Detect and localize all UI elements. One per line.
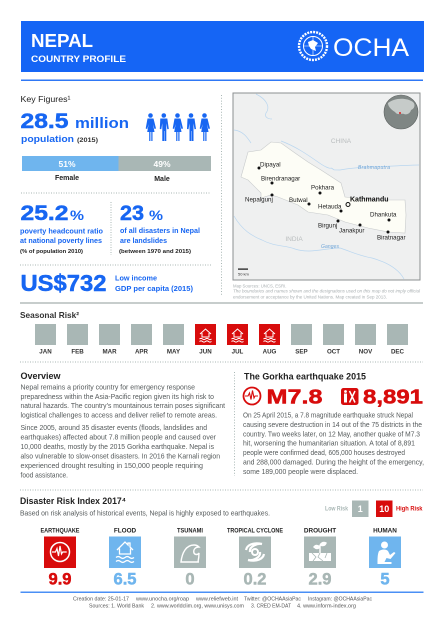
death toll value: 8,891 bbox=[363, 386, 423, 408]
hazard: tropical cyclone bbox=[227, 528, 284, 588]
month labels: DEC bbox=[391, 348, 405, 356]
overview text: 10,000 deaths, mostly by the 2015 Gorkha earthquake. Nepal is bbox=[20, 442, 214, 451]
cities: Biratnagar bbox=[377, 234, 406, 242]
cities: Kathmandu bbox=[350, 196, 388, 204]
heading: seasonal risk: Seasonal Risk² bbox=[20, 310, 79, 320]
cities bbox=[245, 162, 406, 242]
map notes: Map Sources: UNCS, ESRI. bbox=[233, 284, 286, 288]
legend: risk scale: 10 bbox=[379, 504, 389, 514]
overview text: food assistance. bbox=[20, 470, 68, 480]
population figure: 28.5 bbox=[20, 110, 69, 133]
gender bar: 51% bbox=[58, 159, 76, 169]
panel: seasonal risk bbox=[20, 310, 408, 356]
scale bar bbox=[238, 268, 250, 276]
icon: people bbox=[146, 113, 210, 141]
hazard: tropical cyclone: TROPICAL CYCLONE bbox=[227, 528, 284, 534]
icons: flood months bbox=[200, 329, 276, 342]
gender bar bbox=[22, 156, 211, 183]
overview text: also vulnerable to slow-onset disasters. In 2016 the Karnali region bbox=[20, 452, 220, 460]
icon: globe locator bbox=[384, 95, 418, 129]
hazard: flood: 6.5 bbox=[114, 570, 136, 588]
landslide figure: are landslides bbox=[120, 238, 167, 245]
population figure: population bbox=[21, 134, 74, 144]
icon: seismic circle bbox=[244, 388, 260, 404]
overview text: logistical challenges to access and deliver relief to remote areas. bbox=[20, 410, 217, 420]
panel: overview bbox=[20, 371, 225, 480]
hazard: tsunami: TSUNAMI bbox=[177, 528, 203, 534]
month labels bbox=[39, 348, 405, 356]
month labels: APR bbox=[135, 348, 149, 356]
GDP figure: GDP per capita (2015) bbox=[115, 286, 193, 293]
hazard: earthquake: 9.9 bbox=[49, 570, 71, 588]
earthquake text: and 288,000 damaged. During the height of the emergency, bbox=[243, 458, 424, 466]
legend: risk scale: High Risk bbox=[396, 506, 423, 512]
map notes: The boundaries and names shown and the designations used on this map do not imply official bbox=[233, 288, 421, 294]
footer bbox=[73, 596, 372, 610]
overview text: Since 2005, around 35 disaster events (floods, landslides and bbox=[20, 423, 207, 432]
legend: risk scale bbox=[325, 500, 423, 517]
landslide figure bbox=[119, 202, 200, 255]
rivers bbox=[234, 94, 419, 279]
population figure: million bbox=[75, 116, 129, 132]
cities: Birendranagar bbox=[261, 176, 300, 182]
map of Nepal bbox=[233, 93, 420, 280]
hazard: earthquake bbox=[40, 528, 80, 588]
earthquake text: some 189,000 people were displaced. bbox=[243, 467, 358, 476]
cities: Dhankuta bbox=[370, 212, 397, 218]
gender bar: Female bbox=[55, 175, 79, 182]
poverty figure: % bbox=[70, 207, 85, 223]
hazard: flood: FLOOD bbox=[114, 528, 137, 534]
footer: Instagram: @OCHAAsiaPac bbox=[308, 596, 372, 602]
map notes: endorsement or acceptance by the United Nations. Map created in Sep 2013. bbox=[233, 294, 387, 300]
month labels: JUL bbox=[232, 348, 244, 356]
panel: key figures bbox=[20, 94, 211, 296]
legend: risk scale: Low Risk bbox=[325, 506, 348, 512]
cities: Birgunj bbox=[318, 222, 337, 230]
icon: UN emblem bbox=[299, 32, 327, 60]
overview text bbox=[20, 382, 225, 480]
earthquake text bbox=[243, 410, 424, 476]
title: NEPAL bbox=[31, 30, 93, 51]
GDP figure: Low income bbox=[115, 276, 157, 282]
cities: Pokhara bbox=[311, 184, 335, 192]
scale bar: 50 km bbox=[238, 272, 250, 276]
heading: Gorkha earthquake: The Gorkha earthquake 2015 bbox=[244, 372, 367, 382]
month squares bbox=[35, 324, 408, 345]
month labels: NOV bbox=[359, 348, 373, 356]
hazard: earthquake: EARTHQUAKE bbox=[40, 528, 80, 534]
hazard: drought: 2.9 bbox=[309, 570, 331, 588]
overview text: experienced drought resulting in 150,000 people requiring bbox=[20, 461, 203, 470]
earthquake text: people were confirmed dead, 605,000 houses destroyed bbox=[243, 448, 405, 457]
poverty figure bbox=[20, 202, 103, 255]
hazard: drought: DROUGHT bbox=[304, 528, 336, 534]
overview text: earthquakes) affected about 7.8 million people and caused over bbox=[20, 432, 217, 442]
month labels: OCT bbox=[327, 348, 340, 356]
magnitude value: M7.8 bbox=[266, 386, 322, 408]
overview text: preparedness within the Asia-Pacific region given its high risk to bbox=[20, 392, 214, 401]
label: China: CHINA bbox=[331, 138, 352, 145]
poverty figure: 25.2 bbox=[20, 202, 68, 225]
footer: 3. CRED EM-DAT bbox=[251, 604, 292, 610]
hazard: tsunami: 0 bbox=[185, 570, 195, 588]
legend: risk scale: 1 bbox=[358, 504, 363, 514]
cities: Butwal bbox=[289, 197, 308, 204]
GDP figure bbox=[20, 270, 193, 296]
label: India: INDIA bbox=[285, 236, 303, 243]
footer: Twitter: @OCHAAsiaPac bbox=[244, 596, 301, 602]
panel: Gorkha earthquake bbox=[243, 372, 424, 476]
GDP figure: US$732 bbox=[20, 270, 106, 296]
landslide figure: (between 1970 and 2015) bbox=[119, 249, 191, 255]
gender bar: Male bbox=[154, 176, 170, 183]
heading: overview: Overview bbox=[20, 371, 61, 382]
landslide figure: % bbox=[149, 207, 164, 223]
month labels: JUN bbox=[199, 348, 212, 356]
header banner bbox=[21, 21, 424, 72]
hazard: human: HUMAN bbox=[373, 528, 397, 534]
overview text: Nepal remains a priority country for emergency response bbox=[20, 382, 195, 392]
label: Ganges: Ganges bbox=[321, 244, 340, 250]
footer: Creation date: 25-01-17 bbox=[73, 596, 129, 602]
subtitle: COUNTRY PROFILE bbox=[31, 54, 126, 64]
earthquake text: hit, worsening the humanitarian situation. A total of 8,891 bbox=[243, 439, 415, 448]
month labels: FEB bbox=[71, 348, 84, 356]
earthquake text: country. Two weeks later, on 12 May, another quake of M7.3 bbox=[243, 429, 420, 438]
description: Based on risk analysis of historical events, Nepal is highly exposed to earthquakes. bbox=[20, 508, 270, 518]
icon: casualty bbox=[341, 388, 358, 405]
earthquake text: On 25 April 2015, a 7.8 magnitude earthquake struck Nepal bbox=[243, 410, 413, 420]
footer: www.reliefweb.int bbox=[196, 596, 239, 602]
landslide figure: of all disasters in Nepal bbox=[120, 228, 200, 235]
label: Brahmaputra: Brahmaputra bbox=[358, 165, 390, 171]
population figure: (2015) bbox=[77, 138, 98, 144]
panel: disaster risk index bbox=[20, 496, 423, 588]
landslide figure: 23 bbox=[120, 202, 144, 225]
month labels: MAY bbox=[167, 348, 181, 356]
cities: Janakpur bbox=[339, 228, 364, 234]
footer: www.unocha.org/roap bbox=[136, 596, 189, 602]
cities: Hetauda bbox=[318, 204, 342, 210]
cities: Dipayal bbox=[260, 162, 281, 168]
month labels: MAR bbox=[102, 348, 117, 356]
hazard: tropical cyclone: 0.2 bbox=[244, 570, 266, 588]
hazard: human: 5 bbox=[380, 570, 390, 588]
heading: key figures: Key Figures¹ bbox=[20, 94, 71, 104]
month labels: SEP bbox=[295, 348, 308, 356]
heading: disaster risk index: Disaster Risk Index 2017⁴ bbox=[20, 496, 126, 507]
hazard: tsunami bbox=[174, 528, 206, 588]
poverty figure: (% of population 2010) bbox=[20, 249, 83, 255]
hazard: human bbox=[369, 528, 401, 588]
cities: Nepalgunj bbox=[245, 196, 273, 204]
map notes bbox=[233, 284, 421, 300]
OCHA wordmark: OCHA bbox=[333, 34, 409, 62]
gender bar: 49% bbox=[153, 159, 171, 169]
earthquake text: causing severe destruction in 14 out of the 75 districts in the bbox=[243, 420, 422, 429]
Nepal territory bbox=[241, 142, 406, 233]
footer: 2. www.worldclim.org, www.unisys.com bbox=[151, 604, 244, 610]
hazard: flood bbox=[109, 528, 141, 588]
month labels: JAN bbox=[39, 348, 52, 356]
footer: Sources: 1. World Bank bbox=[89, 604, 144, 610]
overview text: natural hazards. The country’s mountainous terrain poses significant bbox=[20, 401, 225, 410]
footer: 4. www.inform-index.org bbox=[297, 604, 356, 610]
hazard: drought bbox=[304, 528, 336, 588]
poverty figure: poverty headcount ratio bbox=[20, 228, 103, 236]
population figure bbox=[20, 110, 129, 144]
poverty figure: at national poverty lines bbox=[20, 238, 102, 245]
month labels: AUG bbox=[263, 348, 277, 356]
